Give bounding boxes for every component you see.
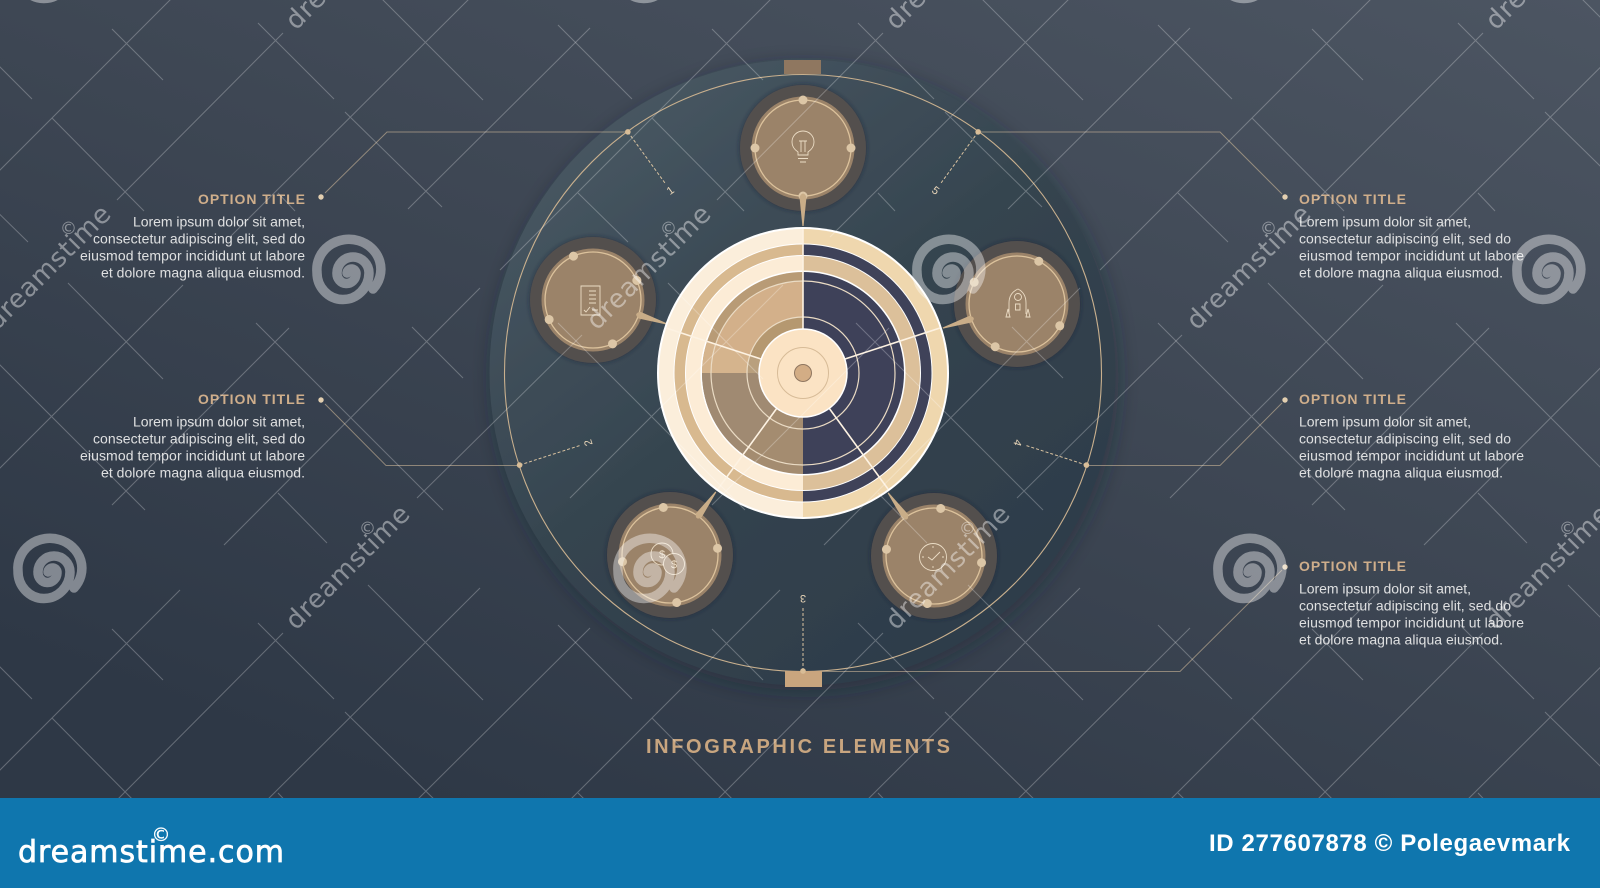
option block 5: right top: consectetur adipiscing elit, sed do [1299, 230, 1511, 246]
option block 4: right middle: et dolore magna aliqua eiusmod. [1299, 464, 1503, 480]
bottom tab [785, 671, 822, 687]
option block 2: left lower: eiusmod tempor incididunt ut labore [80, 448, 305, 464]
hub [759, 329, 847, 417]
option block 4: right middle: consectetur adipiscing elit, sed do [1299, 430, 1511, 446]
option block 2: left lower: OPTION TITLE [198, 391, 305, 407]
numbered marker 2 [516, 438, 596, 469]
option block 3: right bottom: et dolore magna aliqua eiusmod. [1299, 632, 1503, 648]
option block 1: left top: consectetur adipiscing elit, sed do [93, 230, 305, 246]
numbered marker 3 [800, 592, 806, 674]
footer bar [0, 798, 1600, 888]
numbered marker 1 [624, 128, 677, 198]
numbered marker 3: 3 [800, 592, 806, 604]
numbered marker 4: 4 [1010, 438, 1024, 447]
option block 4: right middle: eiusmod tempor incididunt ut labore [1299, 448, 1524, 464]
option block 3: right bottom [1282, 558, 1524, 648]
numbered marker 1: 1 [665, 184, 677, 198]
footer credit: ID 277607878 © Polegaevmark [1209, 830, 1571, 857]
option block 1: left top [80, 191, 324, 280]
connector: option 3 bottom [803, 570, 1282, 672]
icon: light bulb [792, 131, 814, 162]
option block 3: right bottom: OPTION TITLE [1299, 558, 1406, 574]
option block 1: left top: eiusmod tempor incididunt ut labore [80, 248, 305, 264]
panel: large disc [490, 60, 1116, 686]
numbered marker 5: 5 [929, 184, 941, 198]
option block 5: right top [1282, 191, 1524, 280]
icon: rocket [1006, 289, 1030, 317]
quadrants right [803, 272, 904, 474]
watermark text: © [660, 219, 677, 239]
option block 3: right bottom: consectetur adipiscing elit, sed do [1299, 598, 1511, 614]
watermark text: © [60, 219, 77, 239]
option block 1: left top: OPTION TITLE [198, 191, 305, 207]
option block 4: right middle [1282, 391, 1524, 480]
watermark text: dreamstime [280, 499, 416, 636]
satellite: right with rocket icon [942, 233, 1088, 375]
icon: coins: $ [659, 549, 665, 561]
connector: option 2 left lower [325, 404, 518, 466]
connector: option 4 right lower [1087, 403, 1282, 466]
quadrant top left [702, 272, 803, 373]
satellite: bottom right with clock icon [871, 491, 997, 619]
watermark text: © [959, 519, 976, 539]
watermark text: © [359, 519, 376, 539]
chart: central concentric radial diagram [657, 227, 949, 519]
connector: option 5 right top [978, 132, 1282, 194]
satellite: left with document icon [524, 231, 668, 369]
spokes [666, 229, 940, 489]
watermark text: © [1260, 219, 1277, 239]
option block 3: right bottom: eiusmod tempor incididunt ut labore [1299, 614, 1524, 630]
watermark text: dreamstime [880, 499, 1016, 636]
watermark text: dreamstime [581, 199, 717, 336]
watermark spirals [18, 0, 1581, 599]
watermark text [0, 0, 1600, 636]
option block 4: right middle: Lorem ipsum dolor sit amet, [1299, 414, 1471, 430]
outer thin ring [504, 74, 1102, 672]
icon: coins: $ [671, 559, 677, 571]
icon: document [581, 286, 600, 315]
numbered marker 5 [929, 128, 982, 198]
option block 5: right top: Lorem ipsum dolor sit amet, [1299, 214, 1471, 230]
option block 2: left lower: Lorem ipsum dolor sit amet, [133, 414, 305, 430]
option block 2: left lower: et dolore magna aliqua eiusmod. [101, 464, 305, 480]
numbered marker 2: 2 [582, 438, 596, 447]
option block 4: right middle: OPTION TITLE [1299, 391, 1406, 407]
satellite: top with bulb icon [740, 85, 866, 226]
option block 3: right bottom: Lorem ipsum dolor sit amet, [1299, 580, 1471, 596]
watermark text: dreamstime [1181, 199, 1317, 336]
option block 1: left top: Lorem ipsum dolor sit amet, [133, 214, 305, 230]
watermark text: © [1559, 519, 1576, 539]
icon: clock [920, 544, 946, 570]
footer logo: dreamstime.com [18, 835, 284, 870]
connector: option 1 left top [325, 132, 627, 193]
option block 2: left lower [80, 391, 324, 480]
option block 1: left top: et dolore magna aliqua eiusmod. [101, 264, 305, 280]
icon: coins [651, 543, 684, 574]
numbered marker 4 [1010, 438, 1090, 469]
option block 2: left lower: consectetur adipiscing elit, sed do [93, 430, 305, 446]
thin rings [711, 281, 895, 465]
satellite: bottom left with coins icon [607, 490, 733, 618]
title: INFOGRAPHIC ELEMENTS [646, 736, 950, 758]
option block 5: right top: OPTION TITLE [1299, 191, 1406, 207]
footer logo mark: © [152, 824, 170, 846]
option block 5: right top: et dolore magna aliqua eiusmod. [1299, 264, 1503, 280]
option block 5: right top: eiusmod tempor incididunt ut labore [1299, 248, 1524, 264]
top tab [784, 60, 821, 74]
quadrant bottom left [702, 373, 803, 474]
